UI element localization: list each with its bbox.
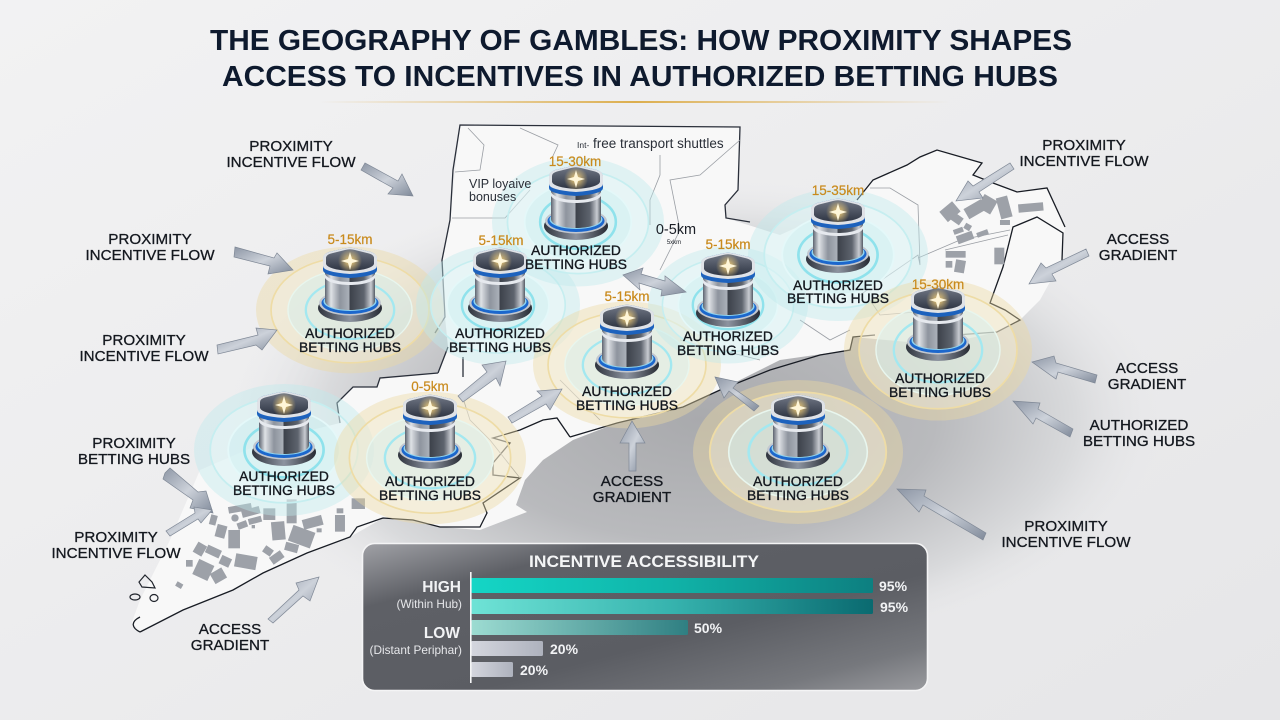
bar chart	[470, 572, 909, 683]
hub: 0-5km south-west: 0-5km	[411, 379, 449, 394]
panel: incentive accessibility	[362, 544, 928, 690]
label: proximity incentive flow, top left: INCENTIVE FLOW	[226, 154, 356, 171]
label: authorized betting hubs, east: BETTING HUBS	[1083, 433, 1195, 450]
label: access gradient, east upper: GRADIENT	[1099, 247, 1177, 264]
arrow: north-east flow	[956, 163, 1014, 201]
axis labels: (Within Hub)	[396, 597, 462, 611]
label: access gradient, east lower: GRADIENT	[1108, 376, 1186, 393]
hub: south coast	[747, 395, 849, 503]
map note: 0-5km: 0-5km	[656, 222, 696, 238]
label: proximity incentive flow, north-east: INCENTIVE FLOW	[1019, 153, 1149, 170]
bar chart: 50%	[694, 620, 723, 636]
hub: 15-35km north-east: 15-35km	[812, 183, 864, 198]
axis labels	[370, 579, 462, 657]
arrow: east hubs	[1013, 401, 1073, 437]
map note: VIP bonuses: VIP loyaive	[469, 177, 531, 191]
title	[210, 25, 1072, 93]
hub rings	[194, 158, 1032, 524]
arrow: south-west lower	[166, 507, 212, 536]
arrow: south-west upper	[163, 468, 213, 513]
hub: 5-15km central-west: AUTHORIZED	[455, 326, 545, 341]
hub: far south-west: BETTING HUBS	[233, 483, 335, 498]
arrow: east gradient lower	[1032, 356, 1097, 383]
label: proximity incentive flow, south-west: INCENTIVE FLOW	[51, 545, 181, 562]
sea shading	[200, 150, 1260, 710]
hub: 15-30km north	[525, 154, 627, 272]
hub: 5-15km east-centre: AUTHORIZED	[683, 329, 773, 344]
arrow: to centre hub	[508, 389, 562, 423]
panel heading: INCENTIVE ACCESSIBILITY	[529, 552, 760, 571]
arrow: south-east flow	[897, 489, 986, 540]
hub: 5-15km east-centre	[677, 237, 779, 358]
hub: 5-15km central-west	[449, 233, 551, 355]
label: proximity betting hubs: PROXIMITY	[92, 435, 176, 452]
hub: south coast: BETTING HUBS	[747, 488, 849, 503]
label: access gradient, south centre: GRADIENT	[593, 489, 671, 506]
hub: 15-30km east: AUTHORIZED	[895, 371, 985, 386]
hub: 5-15km centre: 5-15km	[604, 289, 650, 304]
city blocks: south-west	[175, 498, 365, 589]
label: access gradient, south centre: ACCESS	[601, 473, 663, 490]
arrow: west middle	[217, 328, 277, 354]
arrow: up from access gradient	[620, 421, 645, 471]
arrow: north-west flow	[361, 163, 413, 196]
arrow: double between hubs	[623, 268, 686, 296]
hub: south coast: AUTHORIZED	[753, 474, 843, 489]
axis labels: (Distant Periphar)	[370, 643, 462, 657]
hub: 5-15km centre: AUTHORIZED	[582, 384, 672, 399]
title: ACCESS TO INCENTIVES IN AUTHORIZED BETTING HUBS	[222, 61, 1058, 93]
label: proximity betting hubs: BETTING HUBS	[78, 451, 190, 468]
hub: far south-west: AUTHORIZED	[239, 469, 329, 484]
arrow: coast north-west	[715, 377, 759, 411]
bar chart: 95%	[880, 599, 909, 615]
label: proximity incentive flow, south-west: PROXIMITY	[74, 529, 158, 546]
bar chart: 20%	[550, 641, 579, 657]
hub: 0-5km south-west: BETTING HUBS	[379, 488, 481, 503]
hub: 5-15km west: AUTHORIZED	[305, 326, 395, 341]
label: proximity incentive flow, south-east: INCENTIVE FLOW	[1001, 534, 1131, 551]
arrow: west upper	[234, 247, 293, 274]
hub: 5-15km central-west: BETTING HUBS	[449, 340, 551, 355]
label: proximity incentive flow, west middle: PROXIMITY	[102, 332, 186, 349]
bar chart: 95%	[879, 578, 908, 594]
axis labels: LOW	[424, 625, 460, 642]
hub: 5-15km central-west: 5-15km	[478, 233, 524, 248]
label: proximity incentive flow, west upper: PROXIMITY	[108, 231, 192, 248]
hub: 0-5km south-west	[379, 379, 481, 503]
map note: VIP bonuses: bonuses	[469, 190, 516, 204]
hub: 15-30km east: BETTING HUBS	[889, 385, 991, 400]
map note: free transport shuttles: Int- free transport shuttles	[577, 136, 724, 151]
bar chart: 20%	[520, 662, 549, 678]
hub: 15-30km north: 15-30km	[549, 154, 601, 169]
hub: 15-30km north: AUTHORIZED	[531, 243, 621, 258]
label: proximity incentive flow, south-east: PROXIMITY	[1024, 518, 1108, 535]
label: access gradient, east lower: ACCESS	[1116, 360, 1178, 377]
hub: 5-15km west	[299, 232, 401, 355]
map note: 0-5km: 5xkm	[667, 240, 681, 246]
hub: 5-15km centre: BETTING HUBS	[576, 398, 678, 413]
hub: 15-35km north-east: AUTHORIZED	[793, 278, 883, 293]
hub: 15-30km east: 15-30km	[912, 277, 964, 292]
label: access gradient, south-west: ACCESS	[199, 621, 261, 638]
hub: 5-15km centre	[576, 289, 678, 413]
hub: 5-15km east-centre: 5-15km	[705, 237, 751, 252]
map: land outline	[132, 125, 1065, 632]
hub: far south-west	[233, 392, 335, 498]
label: authorized betting hubs, east: AUTHORIZED	[1090, 417, 1188, 434]
hub: 5-15km east-centre: BETTING HUBS	[677, 343, 779, 358]
arrow: south gradient	[268, 577, 319, 623]
hub: 15-30km east	[889, 277, 991, 400]
city blocks: north-east	[939, 194, 1044, 273]
arrow: east gradient upper	[1029, 249, 1089, 284]
label: proximity incentive flow, west middle: INCENTIVE FLOW	[79, 348, 209, 365]
hub: 5-15km west: 5-15km	[327, 232, 373, 247]
label: proximity incentive flow, top left: PROXIMITY	[249, 138, 333, 155]
hub: 15-35km north-east	[787, 183, 889, 306]
label: access gradient, east upper: ACCESS	[1107, 231, 1169, 248]
islands	[130, 575, 158, 602]
label: access gradient, south-west: GRADIENT	[191, 637, 269, 654]
hub: 15-35km north-east: BETTING HUBS	[787, 291, 889, 306]
label: proximity incentive flow, north-east: PROXIMITY	[1042, 137, 1126, 154]
axis labels: HIGH	[422, 579, 461, 596]
hub: 5-15km west: BETTING HUBS	[299, 340, 401, 355]
title: THE GEOGRAPHY OF GAMBLES: HOW PROXIMITY SHAPES	[210, 25, 1072, 57]
hub: 0-5km south-west: AUTHORIZED	[385, 474, 475, 489]
label: proximity incentive flow, west upper: INCENTIVE FLOW	[85, 247, 215, 264]
arrow: to centre from 0-5km	[458, 361, 506, 402]
hub: 15-30km north: BETTING HUBS	[525, 257, 627, 272]
